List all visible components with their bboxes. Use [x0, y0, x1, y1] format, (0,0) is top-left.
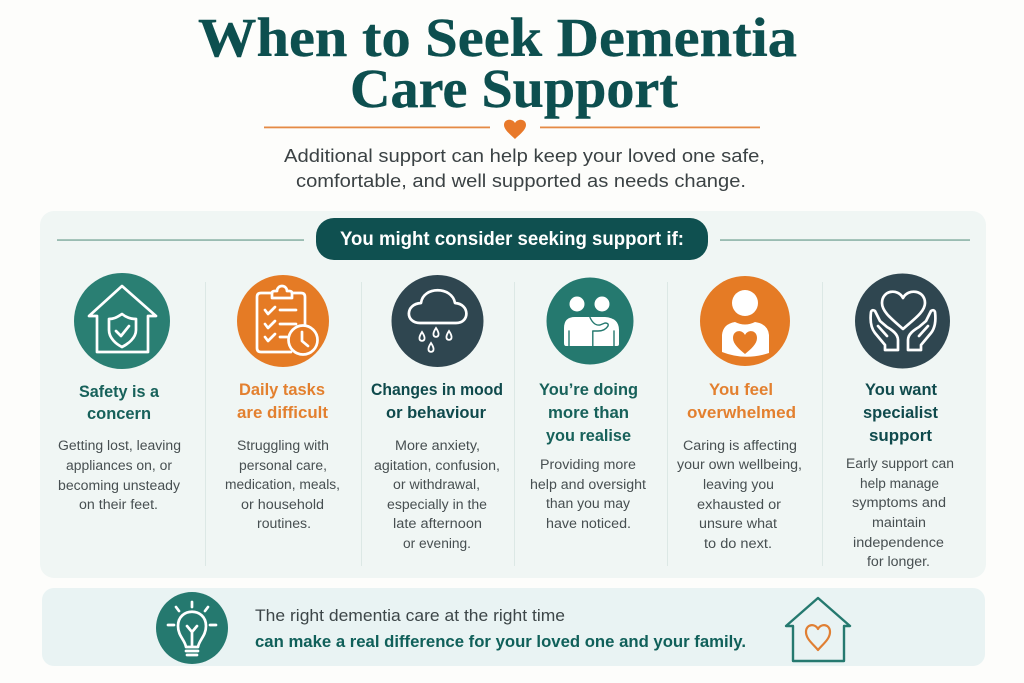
text block: or evening.	[403, 536, 471, 551]
heading: Safety is a	[79, 383, 160, 401]
text block: leaving you	[703, 477, 774, 492]
subtitle: Additional support can help keep your loved one safe,	[284, 145, 765, 166]
text block: your own wellbeing,	[677, 457, 802, 472]
text block: especially in the	[387, 497, 487, 512]
text block: Caring is affecting	[683, 438, 797, 453]
column: daily tasks	[225, 275, 340, 531]
heading: overwhelmed	[687, 404, 796, 422]
column: safety	[58, 273, 181, 512]
icon: clipboard and clock	[237, 275, 329, 367]
text block: to do next.	[704, 536, 772, 551]
text block: medication, meals,	[225, 477, 340, 492]
icon: house with heart	[786, 598, 850, 661]
heading: You feel	[709, 381, 773, 399]
text block: help manage	[860, 476, 939, 491]
heart divider	[264, 120, 760, 139]
text block: Providing more	[540, 457, 636, 472]
text block: on their feet.	[79, 497, 158, 512]
heading: or behaviour	[386, 404, 487, 422]
text block: More anxiety,	[395, 438, 480, 453]
heading: You’re doing	[539, 381, 638, 399]
text block: Early support can	[846, 456, 954, 471]
heading	[863, 381, 938, 445]
title: Care Support	[350, 58, 679, 119]
section heading pill	[316, 218, 708, 260]
text block: independence	[853, 535, 944, 550]
heading	[237, 381, 329, 422]
text block: or household	[241, 497, 324, 512]
heading: you realise	[546, 427, 631, 445]
heading: Changes in mood	[371, 381, 503, 399]
text block	[846, 456, 954, 569]
text block: agitation, confusion,	[374, 458, 500, 473]
subtitle	[284, 145, 765, 191]
heading: You want	[865, 381, 938, 399]
heading: support	[869, 427, 933, 445]
text block: for longer.	[867, 554, 930, 569]
text block: or withdrawal,	[393, 477, 480, 492]
closing text: can make a real difference for your loved one and your family.	[255, 633, 746, 651]
text block: have noticed.	[546, 516, 631, 531]
column: overwhelmed	[677, 276, 802, 551]
panel: closing message	[42, 588, 985, 666]
section heading pill: You might consider seeking support if:	[340, 229, 684, 250]
title: When to Seek Dementia	[198, 7, 797, 68]
text block	[530, 457, 646, 531]
text block	[58, 438, 181, 512]
panel: support signs	[40, 211, 986, 578]
icon: person with heart	[700, 276, 790, 366]
heading: concern	[87, 405, 151, 423]
heading	[371, 381, 503, 422]
heading	[687, 381, 796, 422]
text block: personal care,	[239, 458, 327, 473]
heading: specialist	[863, 404, 938, 422]
icon: rain cloud	[392, 275, 484, 367]
text block: Getting lost, leaving	[58, 438, 181, 453]
title	[198, 7, 797, 119]
text block	[677, 438, 802, 551]
heading: are difficult	[237, 404, 329, 422]
text block: Struggling with	[237, 438, 329, 453]
heading	[539, 381, 638, 445]
text block: maintain	[872, 515, 926, 530]
icon: hands holding heart	[855, 274, 950, 368]
text block: exhausted or	[697, 497, 782, 512]
icon: two people	[546, 278, 634, 364]
text block: late afternoon	[393, 516, 482, 531]
closing text	[255, 607, 746, 651]
text block: appliances on, or	[66, 458, 173, 473]
text block: routines.	[257, 516, 311, 531]
heading: more than	[548, 404, 629, 422]
subtitle: comfortable, and well supported as needs change.	[296, 170, 746, 191]
text block: help and oversight	[530, 477, 646, 492]
column: mood	[371, 275, 503, 551]
column: specialist	[846, 274, 954, 569]
text block: becoming unsteady	[58, 478, 180, 493]
heading: Daily tasks	[239, 381, 325, 399]
text block	[225, 438, 340, 531]
icon: lightbulb	[156, 592, 228, 664]
icon: house with shield	[74, 273, 170, 369]
closing text: The right dementia care at the right time	[255, 607, 565, 625]
heading	[79, 383, 160, 423]
text block: symptoms and	[852, 495, 946, 510]
text block: than you may	[546, 496, 630, 511]
text block: unsure what	[699, 516, 777, 531]
text block	[374, 438, 500, 551]
column: doing more	[530, 278, 646, 531]
